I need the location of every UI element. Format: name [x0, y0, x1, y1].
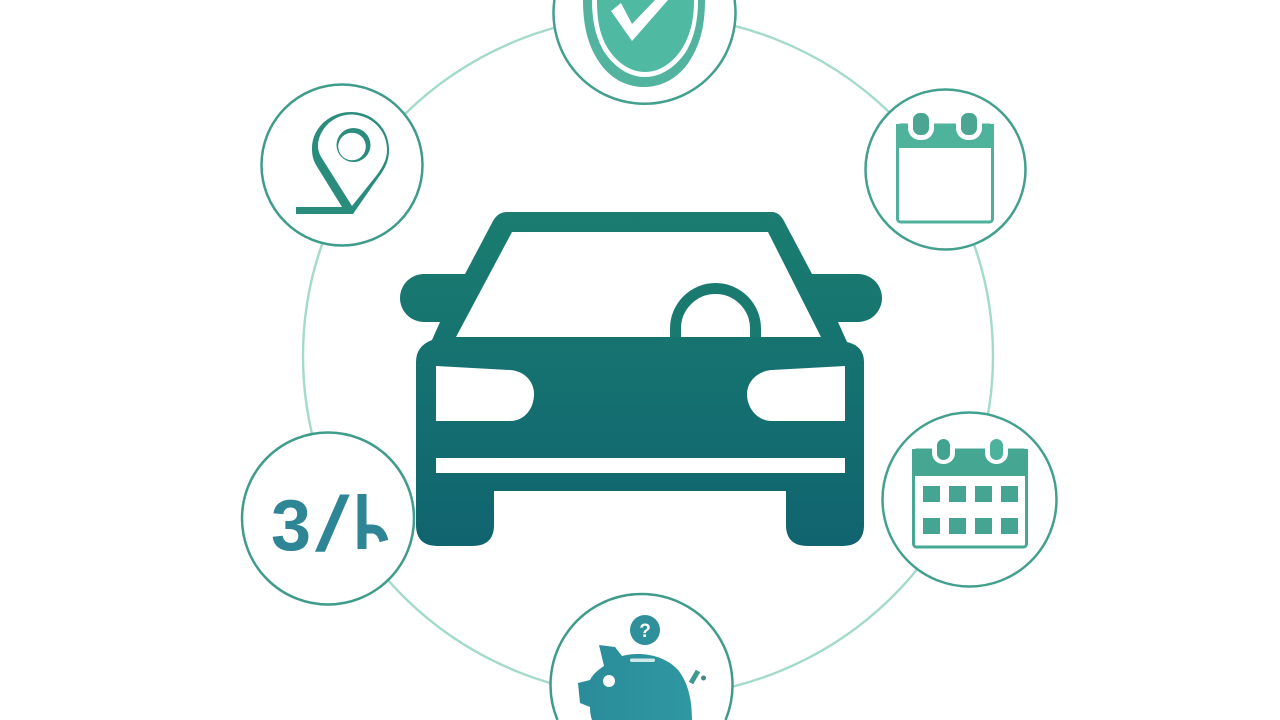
steering wheel arc — [676, 289, 756, 337]
icon: calendar with date grid — [912, 436, 1028, 547]
label: 3/: / — [315, 481, 350, 568]
node: shield — [553, 0, 736, 104]
icon: piggy bank — [578, 645, 706, 720]
central car icon — [400, 212, 882, 546]
node: blank calendar — [866, 90, 1026, 250]
icon: map pin — [296, 112, 389, 214]
car body silhouette — [400, 212, 882, 546]
icon: shield with check — [583, 0, 705, 87]
icon: coin — [630, 615, 660, 645]
node: location pin — [262, 84, 422, 246]
date squares — [923, 486, 1018, 534]
icon: coin: ? — [639, 621, 651, 642]
node: piggy bank — [551, 594, 732, 720]
left headlight — [436, 366, 534, 421]
icon: calendar blank — [896, 110, 994, 222]
label: 3/ — [271, 481, 350, 568]
right headlight — [747, 366, 845, 421]
bumper strip — [436, 458, 845, 473]
icon: stylised four mark — [362, 494, 384, 549]
windshield — [456, 232, 821, 337]
label: 3/: 3 — [271, 486, 311, 566]
node: fraction three quarters — [242, 432, 414, 604]
node: full calendar — [882, 412, 1056, 586]
connecting ring — [303, 15, 993, 697]
